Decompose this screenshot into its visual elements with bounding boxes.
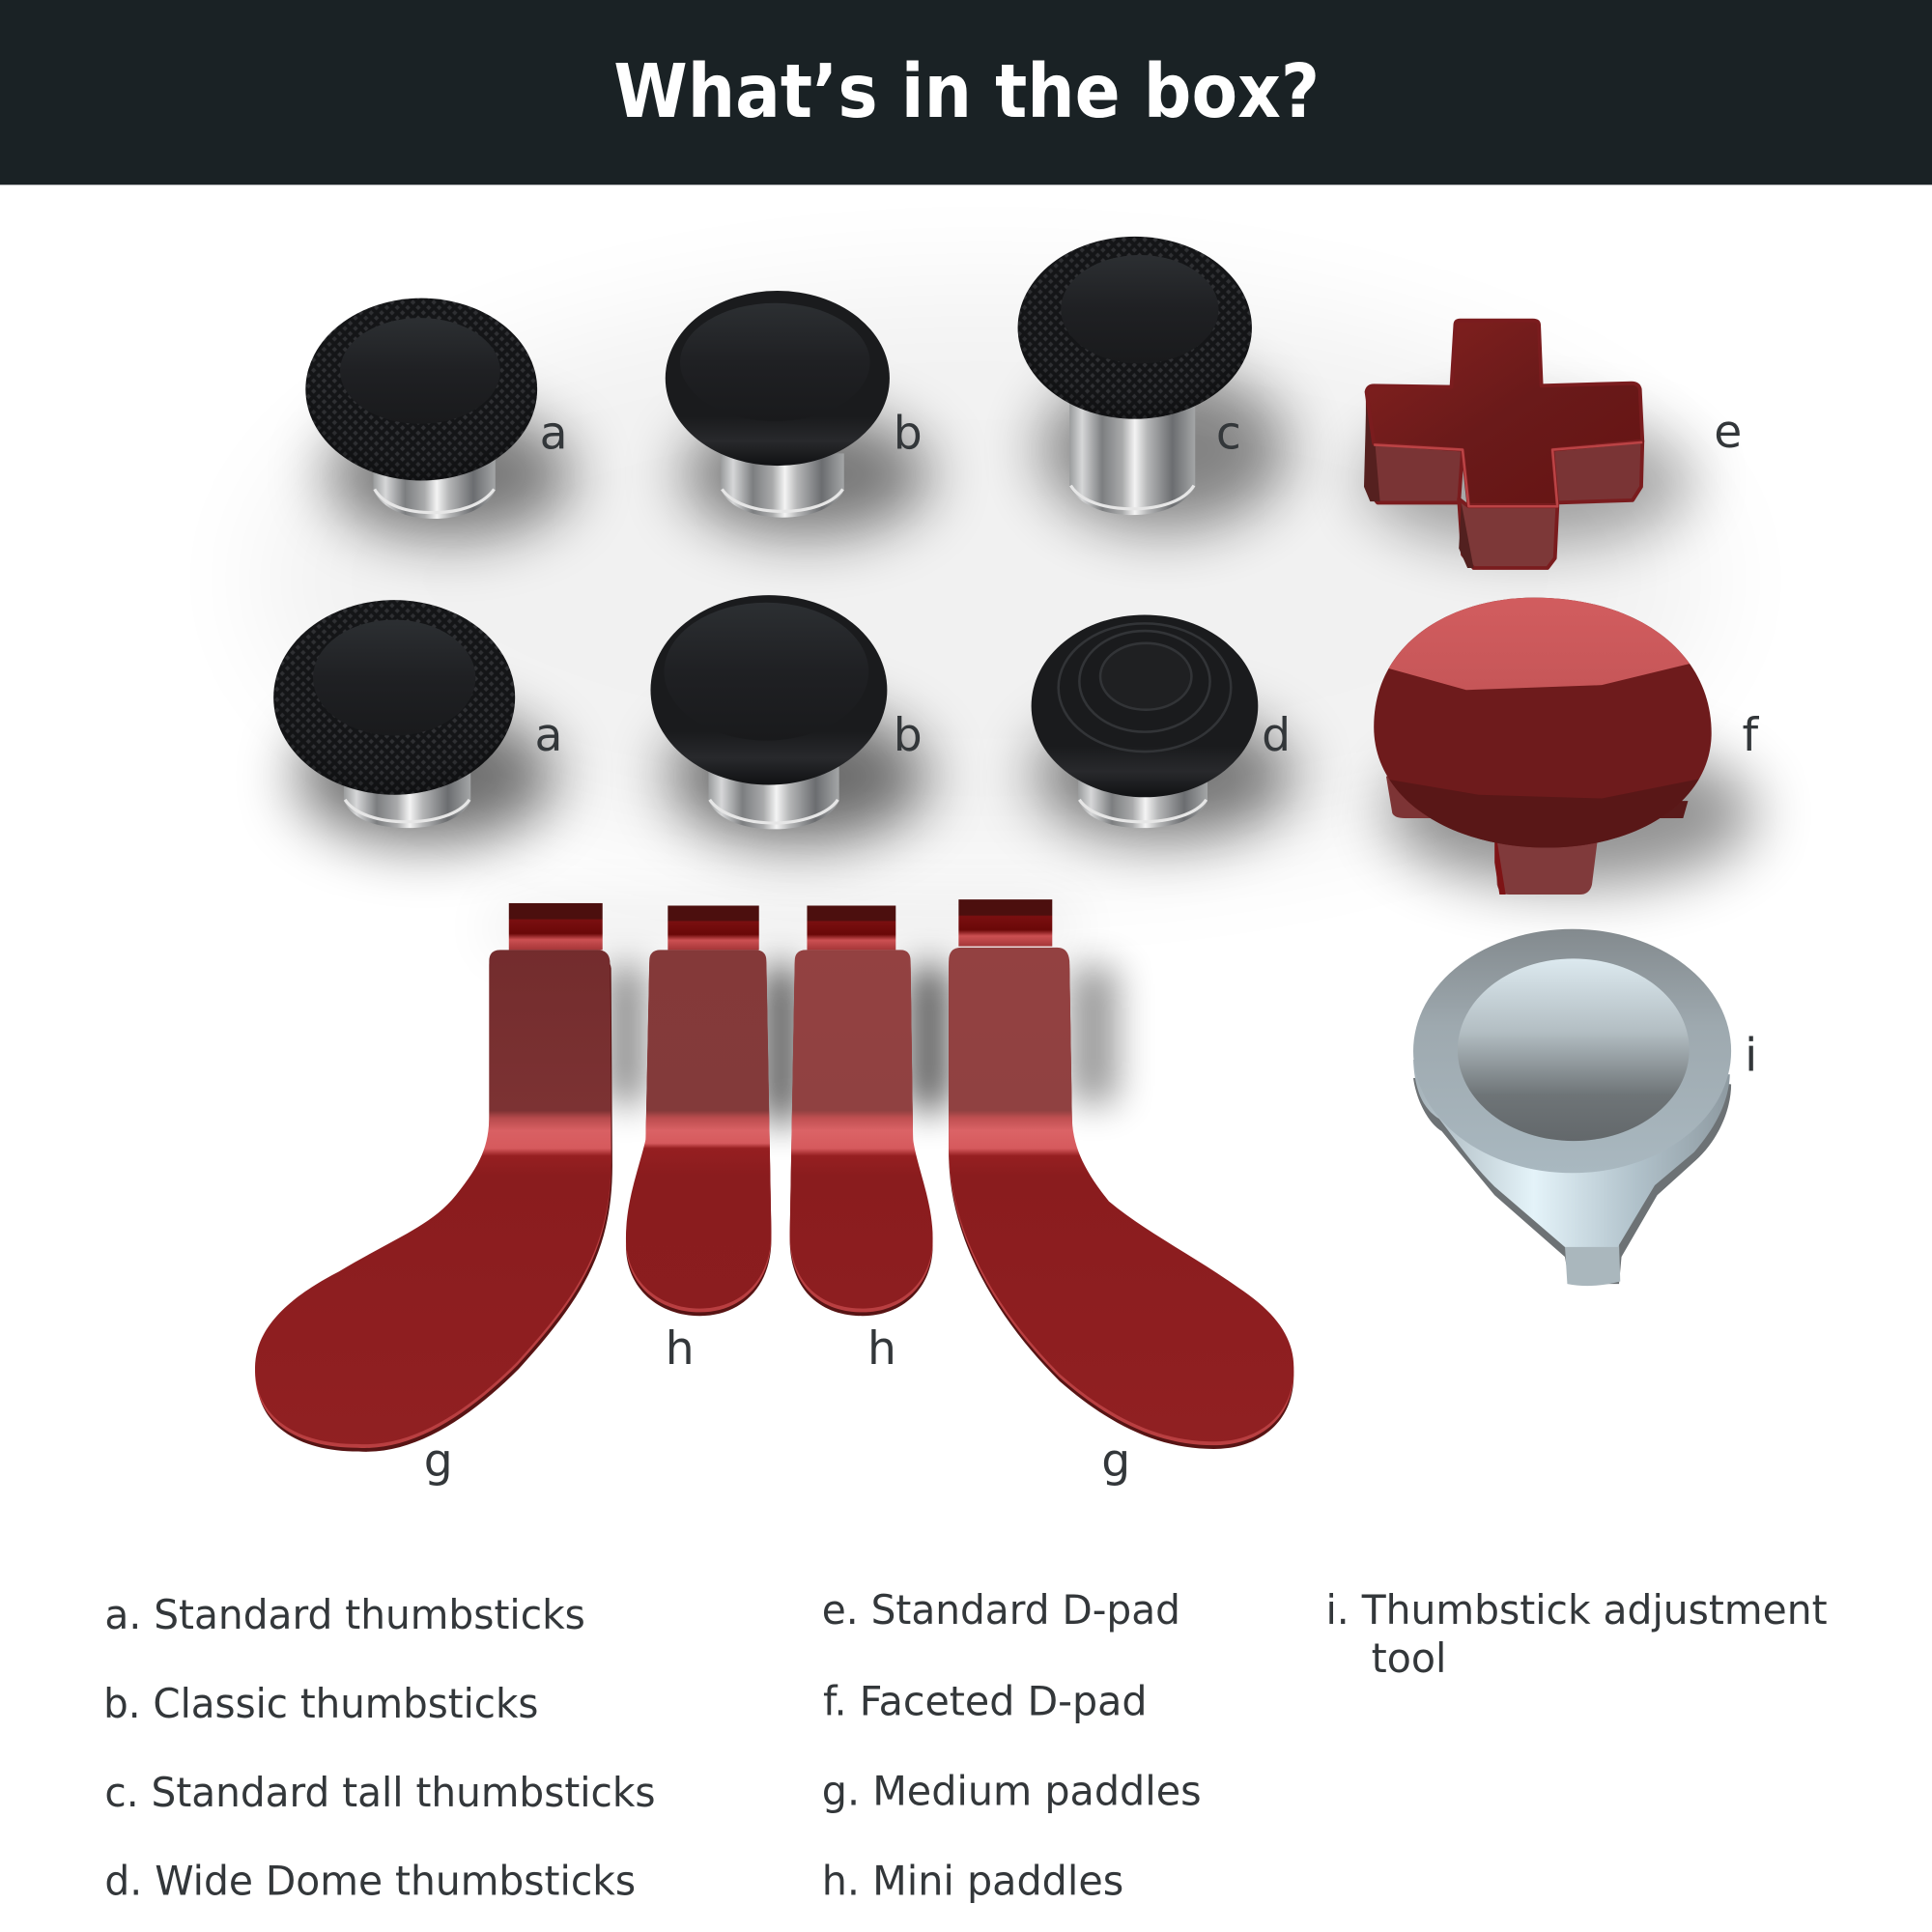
header band with title: What’s in the box? [613, 49, 1320, 135]
part letter labels [424, 406, 1760, 1488]
f D-pad faceted [1374, 597, 1712, 895]
thumbstick b (bottom) [650, 595, 887, 829]
part letter labels: b [894, 407, 923, 460]
legend column 3: i. Thumbstick adjustment [1325, 1586, 1828, 1634]
legend column 1: d. Wide Dome thumbsticks [104, 1858, 636, 1905]
part letter labels: i [1745, 1029, 1757, 1082]
g medium paddle (left) [255, 903, 612, 1452]
h mini paddle (left) [626, 906, 771, 1316]
thumbstick b (top) [666, 291, 890, 518]
legend column 1: b. Classic thumbsticks [103, 1680, 538, 1727]
soft shadows behind parts [259, 283, 1756, 1122]
part letter labels: a [535, 709, 562, 762]
legend column 2: f. Faceted D-pad [823, 1678, 1147, 1725]
part letter labels: d [1262, 709, 1291, 762]
header band with title [0, 0, 1932, 185]
legend column 1: c. Standard tall thumbsticks [104, 1769, 656, 1816]
part letter labels: g [424, 1435, 453, 1488]
part letter labels: b [894, 709, 923, 762]
part letter labels: g [1101, 1435, 1130, 1488]
h mini paddle (right) [790, 906, 933, 1316]
i thumbstick adjustment tool [1413, 929, 1731, 1286]
legend column 1: a. Standard thumbsticks [104, 1591, 585, 1638]
part letter labels: c [1216, 407, 1241, 460]
legend column 2: h. Mini paddles [822, 1858, 1123, 1905]
thumbstick c (tall) [1018, 237, 1252, 515]
legend column 2 [822, 1586, 1202, 1905]
legend column 2: g. Medium paddles [822, 1768, 1202, 1815]
part letter labels: a [540, 407, 568, 460]
thumbstick a (bottom) [273, 600, 515, 828]
part letter labels: h [867, 1322, 896, 1376]
legend column 3: tool [1372, 1634, 1446, 1682]
legend column 2: e. Standard D-pad [822, 1586, 1180, 1634]
legend column 1 [103, 1591, 656, 1905]
part letter labels: f [1743, 709, 1760, 762]
thumbstick a (top) [305, 298, 537, 519]
part letter labels: h [666, 1322, 695, 1376]
g medium paddle (right) [949, 899, 1293, 1449]
thumbstick d (wide dome) [1032, 614, 1258, 828]
legend column 3 [1325, 1586, 1828, 1682]
e D-pad standard [1364, 321, 1642, 568]
part letter labels: e [1714, 406, 1742, 459]
